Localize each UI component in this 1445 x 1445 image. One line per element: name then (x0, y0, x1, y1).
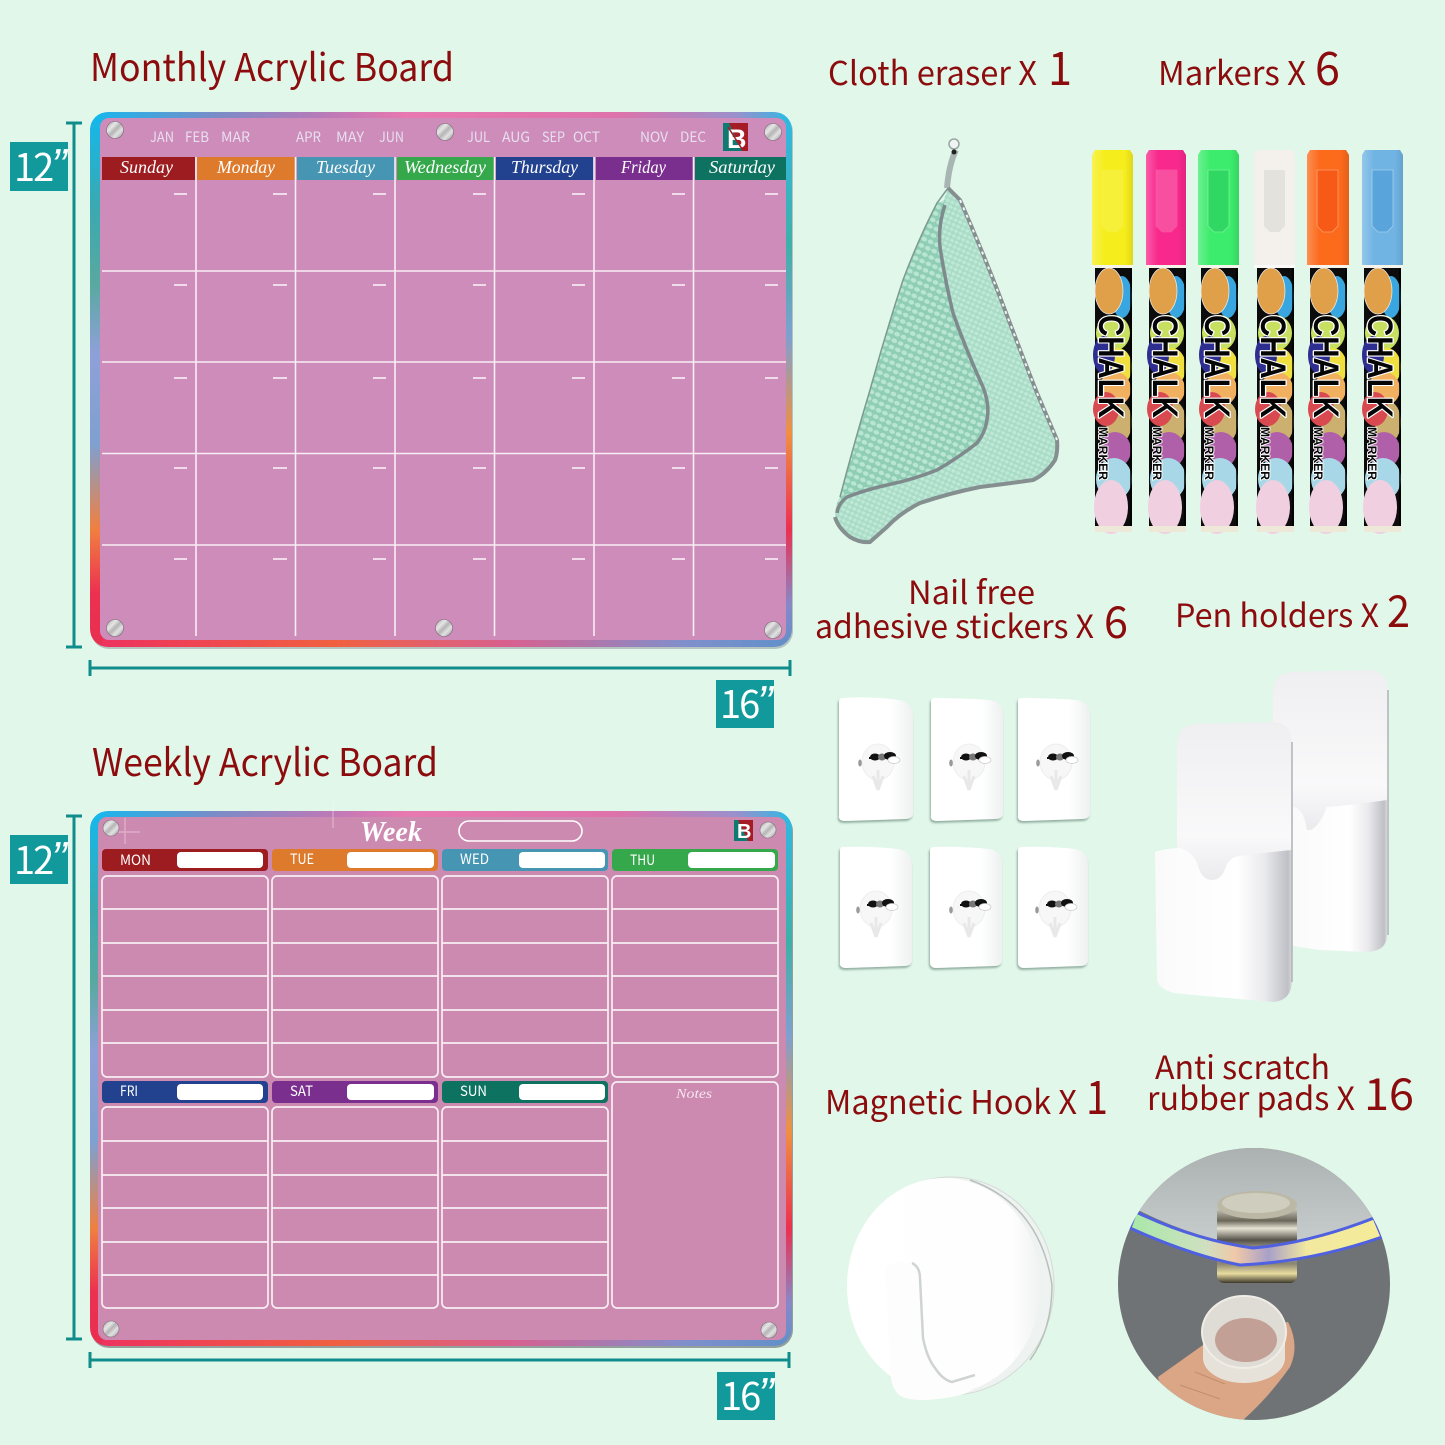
calendar grid (102, 157, 786, 636)
dimension: weekly width 16 inches: 16” (721, 1366, 776, 1421)
month labels: JAN (150, 127, 174, 147)
label: cloth eraser: Cloth eraser X (828, 47, 1037, 95)
label: nail free adhesive stickers: 6 (1104, 587, 1128, 651)
logo: B (737, 821, 751, 843)
label: magnetic hook: Magnetic Hook X (825, 1076, 1077, 1124)
day headers: THU (630, 850, 655, 870)
logo: B (727, 124, 746, 154)
icon: blue marker: MARKER (1365, 427, 1379, 480)
finger (1158, 1322, 1295, 1430)
dimension: monthly height 12 inches (10, 123, 82, 647)
back layer of cloth (835, 188, 1057, 542)
panel: weekly acrylic board (90, 802, 793, 1348)
acrylic edge band (1130, 1212, 1382, 1265)
icon: white marker: CHALK (1253, 315, 1292, 418)
icon: pen holders (1155, 670, 1388, 1002)
week heading: Week (360, 816, 422, 848)
dimension: weekly width 16 inches (90, 1352, 789, 1421)
day headers: SUN (460, 1081, 487, 1101)
front flap of cloth (836, 200, 988, 513)
month labels: SEP (542, 127, 565, 147)
title: monthly board: Monthly Acrylic Board (90, 37, 454, 92)
notes box (612, 1082, 778, 1308)
notes box: Notes (675, 1087, 713, 1102)
month labels: OCT (573, 127, 600, 147)
month labels: FEB (185, 127, 209, 147)
dimension: monthly width 16 inches (90, 660, 790, 729)
month labels (150, 127, 706, 147)
label: nail free adhesive stickers (815, 568, 1128, 651)
label: pen holders: 2 (1387, 576, 1410, 640)
label: pen holders: Pen holders X (1175, 591, 1379, 637)
label: cloth eraser: 1 (1048, 33, 1072, 99)
weekday header row: Wednesday (404, 157, 486, 177)
day headers: TUE (290, 849, 314, 869)
month labels: NOV (640, 127, 669, 147)
weekday header row (102, 157, 786, 180)
weekday header row: Tuesday (316, 157, 375, 177)
label: magnetic hook (825, 1062, 1108, 1128)
magnet stud (1217, 1191, 1297, 1283)
front holder (1155, 722, 1292, 1002)
sparkle highlights (116, 802, 333, 844)
icon: adhesive stickers (839, 697, 1090, 968)
month labels: MAR (221, 127, 250, 147)
icon: yellow marker (1091, 150, 1133, 534)
icon: blue marker (1360, 150, 1403, 534)
weekday header row: Friday (620, 157, 666, 177)
month labels: AUG (502, 127, 530, 147)
mounting screws (106, 122, 782, 638)
icon: orange marker (1306, 150, 1349, 534)
label: nail free adhesive stickers: Nail free (908, 568, 1035, 614)
dimension: monthly width 16 inches: 16” (720, 674, 775, 729)
label: pen holders (1175, 576, 1410, 640)
icon: pink marker: CHALK (1145, 315, 1184, 418)
panel: monthly acrylic board (90, 112, 793, 649)
icon: green marker (1197, 150, 1239, 534)
icon: pink marker (1145, 150, 1186, 534)
month labels: DEC (680, 127, 706, 147)
month labels: APR (296, 127, 321, 147)
label: anti scratch rubber pads: Anti scratch (1155, 1043, 1330, 1089)
icon: orange marker: MARKER (1311, 427, 1325, 480)
day headers: FRI (120, 1081, 138, 1101)
mounting screws (103, 820, 777, 1338)
weekday header row: Monday (216, 157, 275, 177)
day headers: WED (460, 849, 489, 869)
rubber cap (1202, 1296, 1286, 1383)
label: markers: Markers X (1158, 47, 1306, 95)
weekday header row: Thursday (511, 157, 578, 177)
title: weekly board: Weekly Acrylic Board (92, 732, 438, 787)
icon: white marker: MARKER (1258, 427, 1272, 480)
day headers: MON (120, 850, 151, 870)
icon: cloth eraser (835, 139, 1057, 542)
label: magnetic hook: 1 (1086, 1062, 1108, 1128)
icon: yellow marker: MARKER (1096, 427, 1110, 480)
icon: rubber pad photo (1118, 1148, 1390, 1420)
weekday header row: Sunday (120, 157, 173, 177)
month labels: MAY (336, 127, 365, 147)
week number field (459, 821, 582, 841)
label: markers: 6 (1315, 33, 1340, 99)
day headers: SAT (290, 1081, 313, 1101)
label: anti scratch rubber pads: rubber pads X (1147, 1074, 1355, 1120)
icon: green marker: MARKER (1202, 427, 1216, 480)
icon: blue marker: CHALK (1360, 315, 1399, 418)
month labels: JUN (379, 127, 404, 147)
label: nail free adhesive stickers: adhesive stickers X (815, 602, 1094, 648)
label: anti scratch rubber pads: 16 (1364, 1059, 1414, 1123)
day headers (102, 849, 778, 1103)
icon: white marker (1253, 150, 1295, 534)
dimension: weekly height 12 inches (10, 816, 82, 1339)
month labels: JUL (467, 127, 490, 147)
icon: pink marker: MARKER (1150, 427, 1164, 480)
icon: magnetic hook (847, 1177, 1054, 1400)
icon: orange marker: CHALK (1306, 315, 1345, 418)
label: anti scratch rubber pads (1147, 1043, 1414, 1123)
day note boxes (102, 876, 778, 1308)
weekday header row: Saturday (709, 157, 775, 177)
icon: yellow marker: CHALK (1091, 315, 1130, 418)
dimension: monthly height 12 inches: 12” (14, 137, 69, 192)
back holder (1273, 670, 1388, 952)
label: markers (1158, 33, 1340, 99)
label: cloth eraser (828, 33, 1072, 99)
dimension: weekly height 12 inches: 12” (14, 830, 69, 885)
icon: green marker: CHALK (1197, 315, 1236, 418)
